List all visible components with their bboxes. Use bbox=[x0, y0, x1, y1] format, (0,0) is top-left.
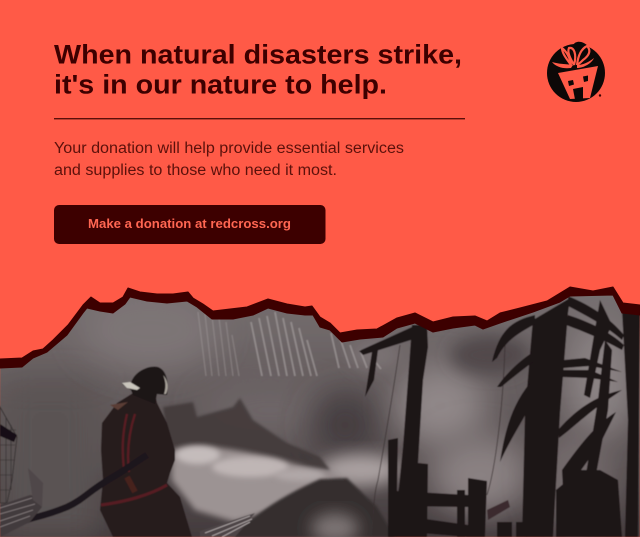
torn paper edge bbox=[0, 287, 640, 368]
icon: gift house logo bbox=[547, 42, 605, 102]
post and fence bbox=[359, 325, 523, 537]
body text: Your donation will help provide essential services bbox=[54, 140, 404, 157]
button: donate bbox=[54, 205, 326, 244]
thin wire bbox=[374, 345, 506, 502]
hose bbox=[0, 455, 147, 528]
corn stalks and leaves bbox=[492, 296, 640, 537]
body text: and supplies to those who need it most. bbox=[54, 162, 337, 179]
divider bbox=[54, 118, 465, 119]
debris mound bbox=[233, 478, 395, 537]
smoke bbox=[0, 290, 635, 537]
corrugated roof bbox=[198, 312, 381, 376]
firefighter bbox=[100, 367, 192, 537]
background rubble bbox=[163, 398, 330, 470]
title: it's in our nature to help. bbox=[54, 70, 387, 100]
body text bbox=[54, 140, 404, 179]
water spray bbox=[172, 446, 335, 522]
button: donate: Make a donation at redcross.org bbox=[88, 217, 291, 231]
title bbox=[54, 40, 462, 100]
photo: firefighter in smoke bbox=[0, 285, 640, 537]
fence debris left bbox=[0, 407, 43, 537]
title: When natural disasters strike, bbox=[54, 40, 462, 70]
